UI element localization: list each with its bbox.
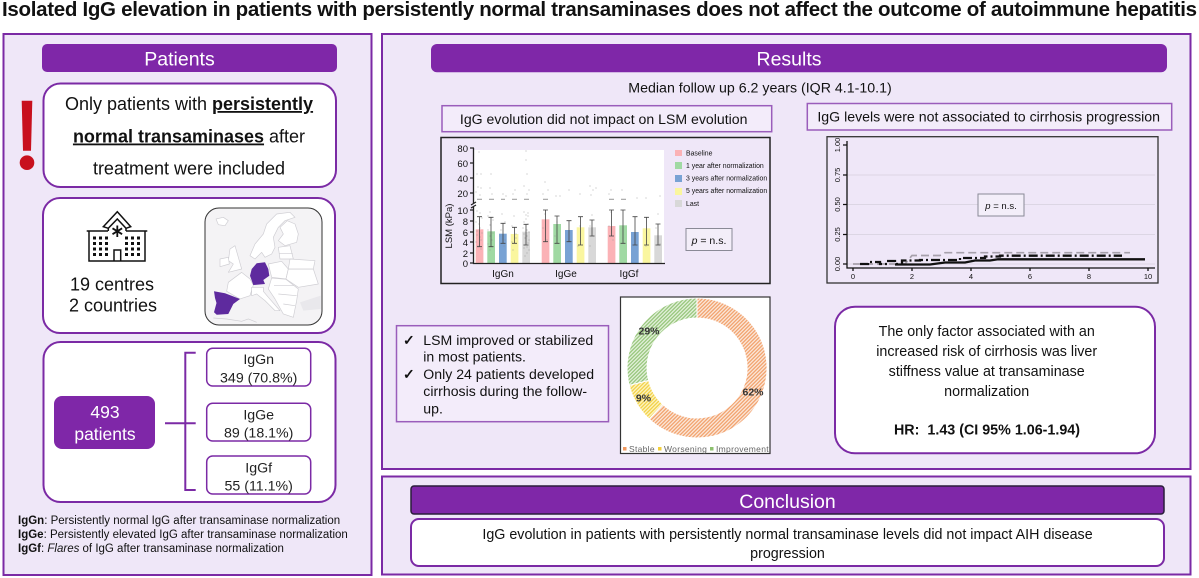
bracket connector [165, 353, 196, 490]
bar chart: LSM evolution: IgGf [620, 269, 639, 280]
heading: patients [42, 44, 337, 72]
text: centres [69, 274, 157, 316]
donut chart: LSM change [620, 297, 770, 454]
axis labels: 40 [457, 174, 468, 185]
subheading: cirrhosis progression [807, 104, 1172, 130]
callout: hazard ratio: stiffness value at transaminase [889, 364, 1085, 380]
line chart: cirrhosis cumulative incidence: 0 [851, 272, 855, 281]
axis labels: 6 [463, 228, 468, 239]
line chart: cirrhosis cumulative incidence: 6 [1028, 272, 1032, 281]
icon: red exclamation mark [20, 101, 34, 170]
total patients [54, 396, 155, 449]
legend [675, 150, 767, 208]
bar chart: LSM evolution [441, 138, 770, 284]
footnote: group definitions: IgGf: Flares of IgG after transaminase normalization [18, 543, 284, 555]
subheading: LSM evolution: IgG evolution did not impact on LSM evolution [460, 111, 747, 127]
donut chart: LSM change: 9% [636, 392, 652, 404]
bar chart: LSM evolution: IgGn [492, 269, 514, 280]
axis labels: 20 [457, 189, 468, 200]
map: Germany [250, 262, 269, 285]
callout: inclusion criteria: normal transaminases after [73, 126, 305, 146]
callout: key outcomes: ✓ [403, 332, 415, 348]
legend: 1 year after normalization [686, 163, 764, 170]
callout: inclusion criteria: Only patients with persistently [65, 94, 313, 114]
axis labels: 80 [457, 144, 468, 155]
axis labels: 0 [463, 259, 468, 270]
heading: results: Results [756, 49, 822, 71]
line chart: cirrhosis cumulative incidence [827, 137, 1158, 283]
donut legend: Stable [629, 444, 655, 454]
callout: inclusion criteria [44, 84, 336, 187]
group: IgGf [207, 456, 311, 495]
axis labels [457, 144, 468, 270]
line chart: cirrhosis cumulative incidence: 10 [1144, 272, 1152, 281]
donut legend: Improvement [716, 444, 769, 454]
group: IgGn [207, 348, 311, 386]
callout: hazard ratio [835, 307, 1155, 453]
p value [978, 194, 1024, 216]
callout: key outcomes: cirrhosis during the follow- [423, 383, 587, 399]
group: IgGe: IgGe [243, 407, 274, 423]
line chart: cirrhosis cumulative incidence: 4 [969, 272, 973, 281]
group: IgGf: IgGf [245, 460, 272, 476]
heading: results [431, 44, 1167, 72]
footnote: group definitions: IgGe: Persistently elevated IgG after transaminase normalization [18, 529, 348, 541]
axes [470, 148, 665, 264]
legend: Baseline [686, 150, 713, 158]
text: centres: 2 countries [69, 296, 157, 316]
callout: hazard ratio: HR: 1.43 (CI 95% 1.06-1.94) [894, 422, 1080, 438]
axis labels: 4 [463, 238, 468, 249]
text: conclusion statement: IgG evolution in patients with persistently normal transaminase levels did not impact AIH disease [482, 527, 1093, 543]
axis labels: 2 [463, 249, 468, 260]
panel: patient groups [44, 342, 336, 502]
callout: hazard ratio: increased risk of cirrhosis was liver [876, 344, 1097, 360]
subheading: LSM evolution [442, 106, 772, 132]
panel: centres and countries [18, 198, 348, 555]
callout: key outcomes: LSM improved or stabilized [423, 332, 593, 348]
axis labels: 8 [463, 217, 468, 228]
panel: results [382, 34, 1190, 469]
footnote: group definitions: IgGn: Persistently normal IgG after transaminase normalization [18, 515, 340, 527]
callout: hazard ratio: The only factor associated with an [879, 324, 1095, 340]
line chart: cirrhosis cumulative incidence: 2 [910, 272, 914, 281]
heading: conclusion: Conclusion [739, 491, 836, 513]
callout: key outcomes: up. [423, 400, 443, 416]
callout: key outcomes: ✓ [403, 366, 415, 382]
text: centres: 19 centres [70, 274, 154, 294]
group: IgGf: 55 (11.1%) [225, 479, 293, 495]
group: IgGe [207, 403, 311, 442]
segment: improvement 29% [627, 298, 697, 385]
line chart: cirrhosis cumulative incidence: 0.50 [833, 197, 842, 212]
donut chart: LSM change: 29% [638, 326, 660, 338]
p value: p = n.s. [691, 235, 726, 247]
gridlines [847, 175, 1155, 264]
subheading: cirrhosis progression: IgG levels were not associated to cirrhosis progression [817, 109, 1160, 125]
scatter points [476, 151, 660, 256]
line chart: cirrhosis cumulative incidence: 1.00 [833, 138, 842, 152]
text: conclusion statement: progression [750, 546, 825, 562]
segment: worsening 9% [629, 380, 663, 419]
bars [476, 219, 662, 263]
legend: 5 years after normalization [686, 188, 767, 195]
line chart: cirrhosis cumulative incidence: 8 [1087, 272, 1091, 281]
text: median follow up: Median follow up 6.2 years (IQR 4.1-10.1) [628, 81, 892, 97]
donut chart: LSM change: 62% [742, 386, 764, 398]
heading: conclusion [411, 486, 1164, 514]
map: Spain [214, 291, 240, 315]
total patients: patients [74, 424, 136, 444]
group: IgGn: 349 (70.8%) [220, 370, 297, 386]
group: IgGe: 89 (18.1%) [224, 426, 293, 442]
callout: key outcomes [396, 326, 608, 422]
p value [686, 228, 732, 250]
segment: stable 62% [649, 298, 767, 438]
callout: inclusion criteria: treatment were included [93, 158, 285, 178]
map of Europe [205, 208, 322, 325]
text: conclusion statement [411, 519, 1164, 566]
callout: key outcomes: in most patients. [423, 349, 526, 365]
p value: p = n.s. [984, 201, 1017, 212]
donut legend: Worsening [664, 444, 707, 454]
line chart: cirrhosis cumulative incidence: 0.25 [833, 227, 842, 242]
bar chart: LSM evolution: LSM (kPa) [444, 204, 455, 248]
axis labels: 10 [457, 206, 468, 217]
donut legend [623, 444, 769, 454]
axis labels: 60 [457, 159, 468, 170]
panel: conclusion [382, 476, 1190, 574]
callout: key outcomes: Only 24 patients developed [423, 366, 594, 382]
curves [853, 253, 1130, 264]
callout: hazard ratio: normalization [944, 384, 1029, 400]
icon: hospital [87, 212, 147, 261]
axes [843, 141, 1155, 271]
break-line data clusters [477, 198, 626, 200]
error bars [477, 210, 660, 247]
group: IgGn: IgGn [243, 352, 274, 368]
line chart: cirrhosis cumulative incidence: 0.00 [833, 257, 842, 271]
bar chart: LSM evolution: IgGe [555, 269, 577, 280]
footnote: group definitions [18, 515, 348, 555]
legend: Last [686, 201, 699, 208]
line chart: cirrhosis cumulative incidence: 0.75 [833, 168, 842, 182]
legend: 3 years after normalization [686, 176, 767, 182]
total patients: 493 [90, 402, 120, 422]
heading: patients: Patients [144, 48, 215, 70]
